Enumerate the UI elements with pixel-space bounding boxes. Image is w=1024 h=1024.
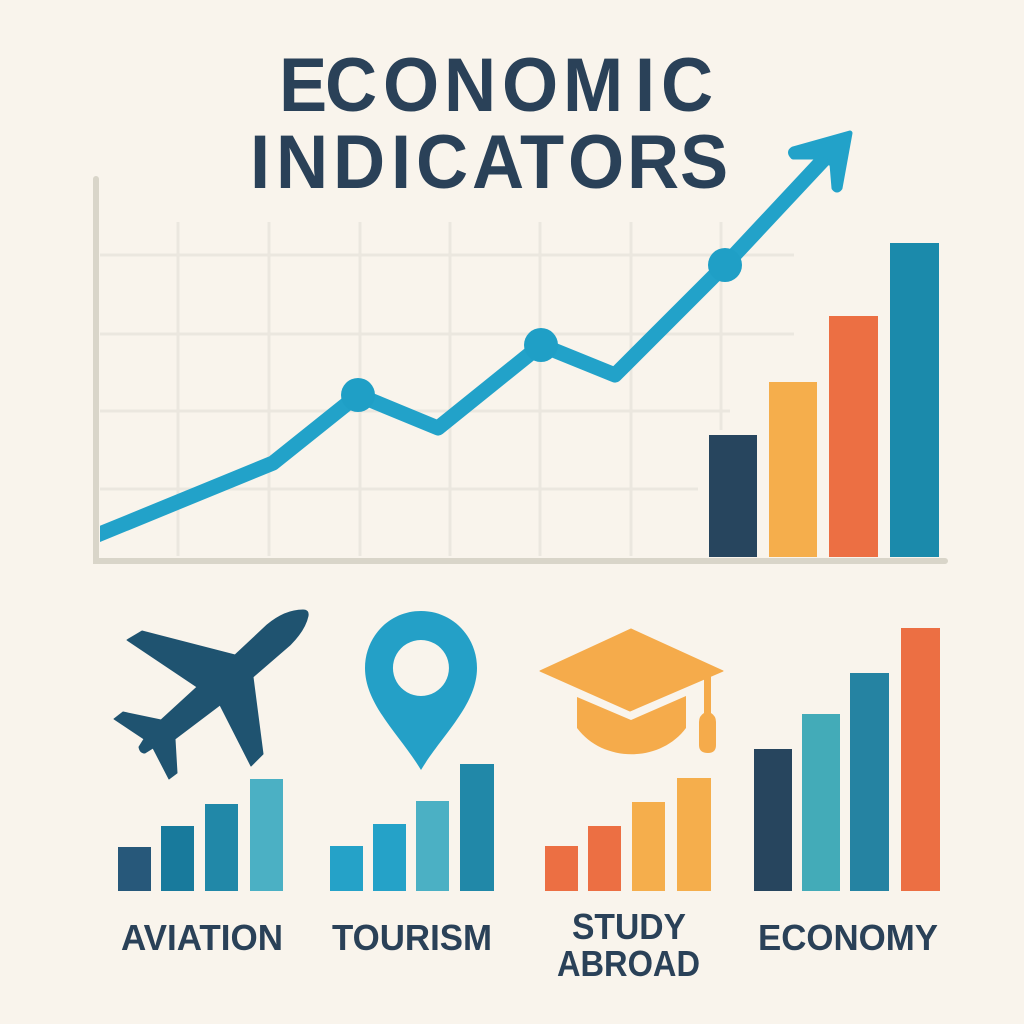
title: ECONOMIC: [279, 42, 713, 127]
line chart grid: [100, 222, 794, 556]
bar chart: study abroad: [545, 778, 711, 891]
arrowhead: [790, 133, 850, 190]
chart axes: [96, 179, 945, 561]
bar chart: main: [709, 243, 939, 557]
label: study abroad: STUDY: [572, 906, 686, 947]
icon: airplane: [114, 610, 308, 779]
bar chart: economy: [754, 628, 940, 891]
label: aviation: AVIATION: [121, 917, 283, 958]
icon: graduation cap: [540, 629, 723, 754]
title: [250, 42, 728, 204]
label: economy: ECONOMY: [758, 917, 938, 958]
trend line with arrow: [90, 133, 850, 538]
icon: location pin: [365, 611, 477, 770]
title: INDICATORS: [250, 119, 728, 204]
label: study abroad: ABROAD: [557, 943, 700, 984]
label: tourism: TOURISM: [332, 917, 492, 958]
bar chart: aviation: [118, 779, 283, 891]
line markers: [341, 248, 742, 412]
bar chart: tourism: [330, 764, 494, 891]
label: study abroad: [557, 906, 700, 984]
